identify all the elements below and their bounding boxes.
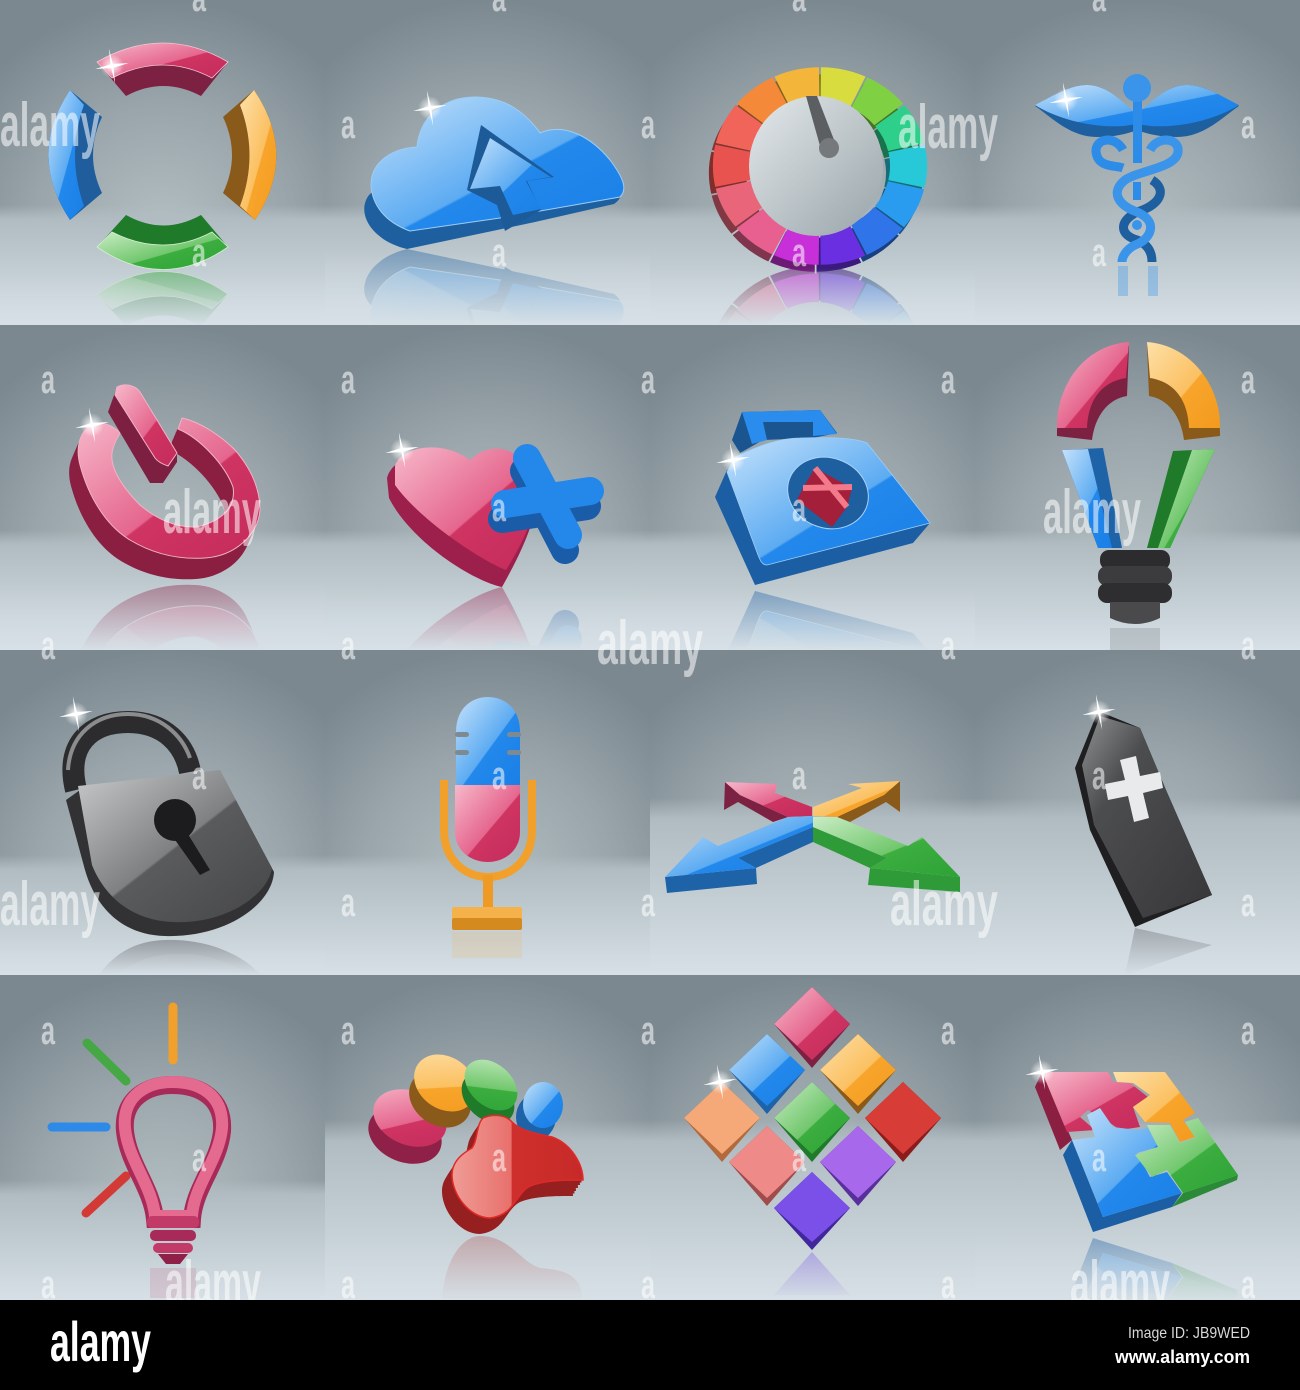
watermark: repeated marks: a — [792, 1136, 806, 1180]
watermark: repeated marks: a — [492, 754, 506, 798]
watermark: repeated marks: alamy — [898, 93, 998, 162]
watermark: repeated marks: a — [341, 1009, 355, 1053]
watermark: repeated marks: a — [941, 624, 955, 668]
watermark: repeated marks: a — [341, 103, 355, 147]
icon: caduceus — [1035, 74, 1239, 262]
reflection: heart — [325, 587, 650, 745]
footer bar — [0, 1300, 1300, 1390]
watermark: repeated marks: alamy — [890, 870, 998, 939]
background: row 3 panels — [0, 650, 1300, 975]
icon: four-segment ring — [48, 43, 276, 270]
watermark: repeated marks: a — [941, 1009, 955, 1053]
reflection: coffin — [975, 928, 1300, 975]
reflection: cloud — [325, 249, 650, 411]
footer bar: alamy — [50, 1310, 151, 1373]
icon: power button — [69, 385, 260, 579]
watermark: repeated marks: a — [41, 1009, 55, 1053]
footer bar: www.alamy.com — [1114, 1347, 1250, 1367]
icon: microphone — [444, 697, 532, 930]
reflection: ring — [0, 271, 325, 326]
reflection: microphone base — [452, 932, 522, 958]
icon: cloud upload — [364, 87, 624, 249]
reflection: bulb base — [1110, 628, 1160, 650]
watermark: repeated marks: a — [641, 358, 655, 402]
watermark: repeated marks: a — [1092, 231, 1106, 275]
watermark: repeated marks: a — [492, 231, 506, 275]
watermark: repeated marks: a — [341, 1263, 355, 1307]
watermark: repeated marks: a — [192, 1136, 206, 1180]
watermark: repeated marks: alamy — [1070, 1249, 1170, 1318]
background: row 4 panels — [0, 975, 1300, 1300]
icon: light bulb infographic — [1057, 342, 1220, 624]
icon: paw — [360, 1043, 583, 1234]
reflection: padlock — [0, 938, 325, 1183]
watermark: repeated marks: a — [41, 624, 55, 668]
watermark: repeated marks: a — [792, 231, 806, 275]
watermark: repeated marks: a — [492, 1136, 506, 1180]
watermark: repeated marks: a — [941, 1263, 955, 1307]
reflection: mosaic — [650, 1252, 975, 1300]
icon: heart with cross — [382, 429, 590, 587]
reflection: paw — [325, 1236, 650, 1300]
reflection: puzzle — [975, 1236, 1300, 1390]
background: row 2 panels — [0, 325, 1300, 650]
reflection: idea bulb — [150, 1268, 196, 1298]
watermark: repeated marks: alamy — [163, 478, 261, 547]
icon: coffin — [1075, 691, 1212, 927]
watermark: repeated marks: a — [1241, 1009, 1255, 1053]
icon: jigsaw puzzle — [1022, 1051, 1238, 1232]
reflection: caduceus — [1118, 266, 1158, 296]
watermark: repeated marks: a — [1092, 754, 1106, 798]
watermark: repeated marks: a — [341, 624, 355, 668]
watermark: repeated marks: alamy — [0, 91, 100, 160]
icon: colour gauge — [711, 69, 925, 270]
watermark: repeated marks: a — [192, 754, 206, 798]
watermark: repeated marks: a — [1092, 1136, 1106, 1180]
icon: padlock — [56, 693, 274, 936]
watermark: repeated marks: a — [792, 754, 806, 798]
reflection: power button — [0, 582, 325, 779]
watermark: repeated marks: a — [192, 231, 206, 275]
watermark: repeated marks: a — [641, 1263, 655, 1307]
watermark: repeated marks: a — [641, 1009, 655, 1053]
watermark: repeated marks: a — [492, 486, 506, 530]
watermark: repeated marks: a — [641, 881, 655, 925]
icon: idea bulb with rays — [52, 1007, 222, 1264]
watermark: repeated marks: a — [792, 486, 806, 530]
watermark: repeated marks: a — [1241, 103, 1255, 147]
footer bar: Image ID: JB9WED — [1128, 1325, 1250, 1342]
watermark: repeated marks: a — [1241, 624, 1255, 668]
reflection: gauge — [650, 268, 975, 469]
watermark: repeated marks: alamy — [597, 609, 703, 678]
watermark: repeated marks: a — [341, 358, 355, 402]
watermark: repeated marks: a — [1241, 358, 1255, 402]
background: row 1 panels — [0, 0, 1300, 325]
watermark: repeated marks: a — [941, 358, 955, 402]
watermark: repeated marks: alamy — [1043, 478, 1141, 547]
watermark: repeated marks: a — [641, 103, 655, 147]
watermark: repeated marks: a — [41, 358, 55, 402]
icon: diamond tile mosaic — [684, 987, 941, 1250]
watermark: repeated marks: a — [341, 881, 355, 925]
icon: medical bag — [713, 410, 930, 585]
watermark: repeated marks: a — [1241, 881, 1255, 925]
watermark: repeated marks: alamy — [0, 870, 100, 939]
watermark: repeated marks: alamy — [165, 1249, 261, 1318]
icon: four-way arrows — [665, 781, 960, 893]
watermark: repeated marks: a — [1241, 1263, 1255, 1307]
reflection: medical bag — [650, 588, 975, 766]
watermark: repeated marks: a — [41, 1263, 55, 1307]
